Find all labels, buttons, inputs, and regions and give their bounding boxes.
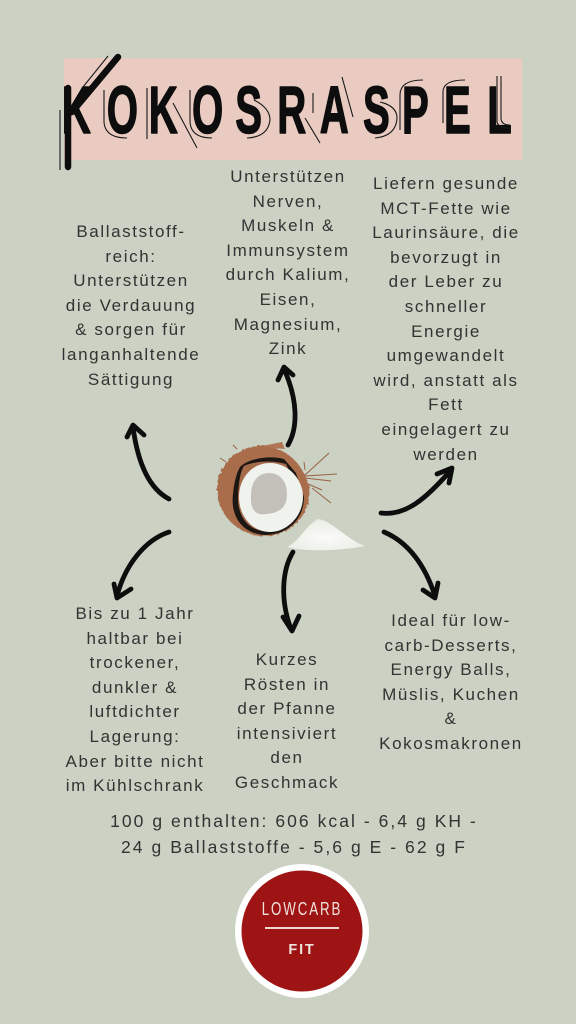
logo badge: Lowcarb Fit: FIT [288,942,316,958]
text block: MCT-Fette: MCT-Fette wie [380,199,512,218]
text block: Ballaststoff: Unterstützen [73,271,189,290]
text block: MCT-Fette: Laurinsäure, die [372,223,520,242]
text block: Verwendung [379,611,523,753]
text block: Verwendung: Energy Balls, [391,660,511,679]
text block: Verwendung: carb-Desserts, [385,636,517,655]
title banner background [64,58,522,160]
text block: Nerven und Muskeln: durch Kalium, [226,265,350,284]
arrow: down-right to usage block [384,532,438,598]
text block: Ballaststoff: reich: [105,247,157,266]
text block: Rösten: Kurzes [256,650,318,669]
text block: MCT-Fette: Energie [411,322,481,341]
nutrition facts [110,811,478,857]
text block: Ballaststoff: & sorgen für [75,320,187,339]
arrow: up to nerves block [278,367,295,445]
arrow: up-left to fiber block [127,425,169,499]
text block: Haltbarkeit: luftdichter [89,702,181,721]
text block: Haltbarkeit: Lagerung: [90,727,180,746]
text block: Verwendung: Ideal für low- [391,611,511,630]
text block: Ballaststoff: langanhaltende [62,345,200,364]
text block: Haltbarkeit: haltbar bei [86,629,184,648]
text block: Rösten [235,650,339,792]
text block: MCT-Fette: der Leber zu [389,272,503,291]
text block: Haltbarkeit: trockener, [90,653,180,672]
powder pile [287,519,365,550]
text block: Haltbarkeit: im Kühlschrank [66,776,204,795]
text block: MCT-Fette: Liefern gesunde [373,174,519,193]
text block: Nerven und Muskeln: Unterstützen [230,167,346,186]
text block: Rösten: Geschmack [235,773,339,792]
text block: Verwendung: Müslis, Kuchen [382,685,520,704]
text block: MCT-Fette: eingelagert zu [381,420,511,439]
text block: MCT-Fette [372,174,520,464]
arrow: down to roasting block [283,552,299,631]
text block: MCT-Fette: Fett [428,395,464,414]
text block: Haltbarkeit: Aber bitte nicht [66,752,204,771]
extended K strokes [68,57,118,167]
text block: MCT-Fette: bevorzugt in [390,248,502,267]
text block: Nerven und Muskeln: Nerven, [253,192,323,211]
text block: Ballaststoff [62,222,200,389]
text block: Rösten: Rösten in [244,675,330,694]
nutrition facts: 24 g Ballaststoffe - 5,6 g E - 62 g F [121,837,467,857]
arrow: right to MCT block [381,468,452,513]
text block: Nerven und Muskeln: Immunsystem [226,241,350,260]
nutrition facts: 100 g enthalten: 606 kcal - 6,4 g KH - [110,811,478,831]
text block: Nerven und Muskeln [226,167,350,358]
text block: Nerven und Muskeln: Muskeln & [241,216,335,235]
text block: Verwendung: Kokosmakronen [379,734,523,753]
text block: Rösten: der Pfanne [237,699,337,718]
title: Kokosraspel [59,54,512,170]
arrow: down-left to storage block [114,532,169,598]
text block: Nerven und Muskeln: Zink [269,339,307,358]
text block: Haltbarkeit: Bis zu 1 Jahr [75,604,195,623]
text block: Verwendung: & [445,709,457,728]
text block: MCT-Fette: schneller [405,297,487,316]
text block: Rösten: den [270,748,304,767]
text block: Haltbarkeit [66,604,204,795]
logo badge: Lowcarb Fit: LOWCARB [262,899,342,920]
title letters: KOKOSRASPEL [62,72,512,148]
text block: Haltbarkeit: dunkler & [92,678,178,697]
text block: MCT-Fette: wird, anstatt als [373,371,519,390]
text block: MCT-Fette: werden [413,445,479,464]
text block: Ballaststoff: Sättigung [88,370,174,389]
text block: Rösten: intensiviert [237,724,337,743]
text block: Nerven und Muskeln: Eisen, [260,290,316,309]
text block: MCT-Fette: umgewandelt [387,346,505,365]
icon: coconut with powder [217,442,365,550]
text block: Nerven und Muskeln: Magnesium, [234,315,342,334]
text block: Ballaststoff: Ballaststoff- [76,222,186,241]
text block: Ballaststoff: die Verdauung [66,296,196,315]
